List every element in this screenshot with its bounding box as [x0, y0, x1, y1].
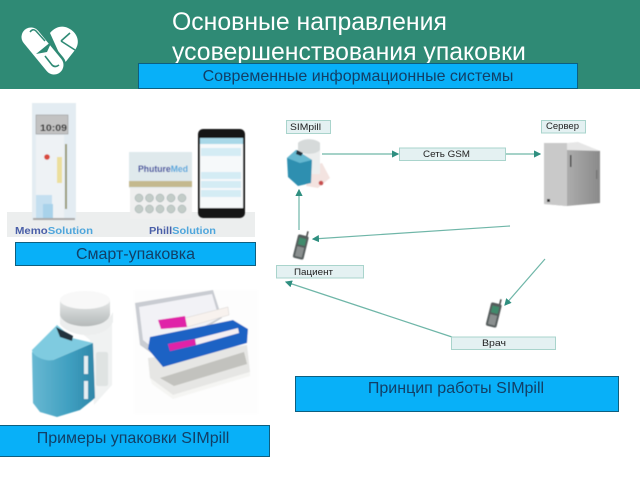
- arrow: GSM network to server: [506, 153, 540, 155]
- dark sensor window: [56, 327, 73, 341]
- white body: [304, 148, 320, 174]
- label box: patient: Пациент: [294, 267, 334, 278]
- banner: SIMpill packaging examples: [0, 425, 270, 457]
- arrow: doctor to patient: [286, 282, 452, 337]
- flow diagram: how SIMpill works: [286, 154, 545, 337]
- label box: doctor: Врач: [482, 338, 506, 349]
- banner: smart packaging: Смарт-упаковка: [76, 246, 195, 263]
- label box: doctor: [452, 337, 556, 350]
- arrow: server to patient phone: [313, 226, 510, 239]
- label box: GSM network: Сеть GSM: [423, 149, 470, 160]
- bottle cap: [60, 300, 110, 326]
- banner: modern information systems: [138, 63, 578, 89]
- case base: [148, 345, 250, 395]
- arrow: SIMpill to GSM network: [322, 153, 398, 155]
- blue tray: [148, 320, 248, 367]
- smart packaging photo: MemoSolution and PhillSolution: [7, 103, 255, 237]
- capsule outline gap: [31, 37, 54, 65]
- title: усовершенствования упаковки: [172, 39, 526, 66]
- capsule body: [31, 37, 54, 65]
- device: MemoSolution: [32, 103, 76, 220]
- icon: server tower: [544, 142, 600, 206]
- capsule seam: [36, 41, 52, 54]
- pen in tray: [195, 328, 239, 345]
- teal casing: [287, 150, 312, 186]
- pen in lid: [185, 307, 229, 327]
- banner: SIMpill packaging examples: Примеры упаковки SIMpill: [37, 430, 229, 447]
- right lobe of heart: [50, 27, 78, 64]
- photo backdrop: [134, 290, 258, 414]
- arrow: phone up to SIMpill: [298, 190, 300, 230]
- teal casing front: [32, 343, 95, 417]
- teal casing top face: [32, 325, 93, 360]
- SIMpill small device: [287, 139, 330, 188]
- header band: [0, 0, 640, 89]
- capsule highlights: [30, 30, 45, 41]
- smartphone: [198, 129, 245, 218]
- banner: smart packaging: [15, 242, 256, 266]
- pill box: PhutureMed: PhutureMed: [138, 164, 188, 174]
- title: [172, 9, 526, 66]
- label: MemoSolution: Memo Solution: [15, 226, 93, 237]
- banner: SIMpill working principle: [295, 376, 619, 412]
- icon: patient phone: [293, 229, 310, 260]
- white body behind: [62, 318, 112, 405]
- cap: [298, 139, 320, 154]
- label: PhillSolution: PhillSolution: [149, 226, 216, 237]
- case lid: [135, 290, 222, 358]
- banner: SIMpill working principle: Принцип работы SIMpill: [368, 380, 544, 397]
- icon: heart with pill: [30, 27, 78, 67]
- banner: modern information systems: Современные информационные системы: [203, 68, 513, 85]
- side slots: [84, 356, 88, 374]
- label box: server: Сервер: [546, 121, 579, 132]
- title: Основные направления: [172, 9, 447, 36]
- label box: patient: [276, 266, 364, 278]
- bottle collar: [60, 312, 113, 335]
- label box: SIMpill: SIMpill: [290, 122, 321, 133]
- paper sheet: [306, 163, 330, 188]
- arrow: server to doctor phone: [505, 259, 545, 305]
- label box: SIMpill: [286, 120, 330, 134]
- device: MemoSolution: 10:09: [40, 123, 67, 133]
- label box: server: [542, 120, 586, 133]
- label box: GSM network: [400, 148, 506, 160]
- photo: open case with injector pens: [134, 290, 258, 414]
- pill box: PhutureMed: [129, 152, 192, 219]
- icon: doctor phone: [486, 297, 503, 328]
- pill dot: [319, 181, 323, 185]
- photo: SIMpill bottle large: [32, 291, 113, 417]
